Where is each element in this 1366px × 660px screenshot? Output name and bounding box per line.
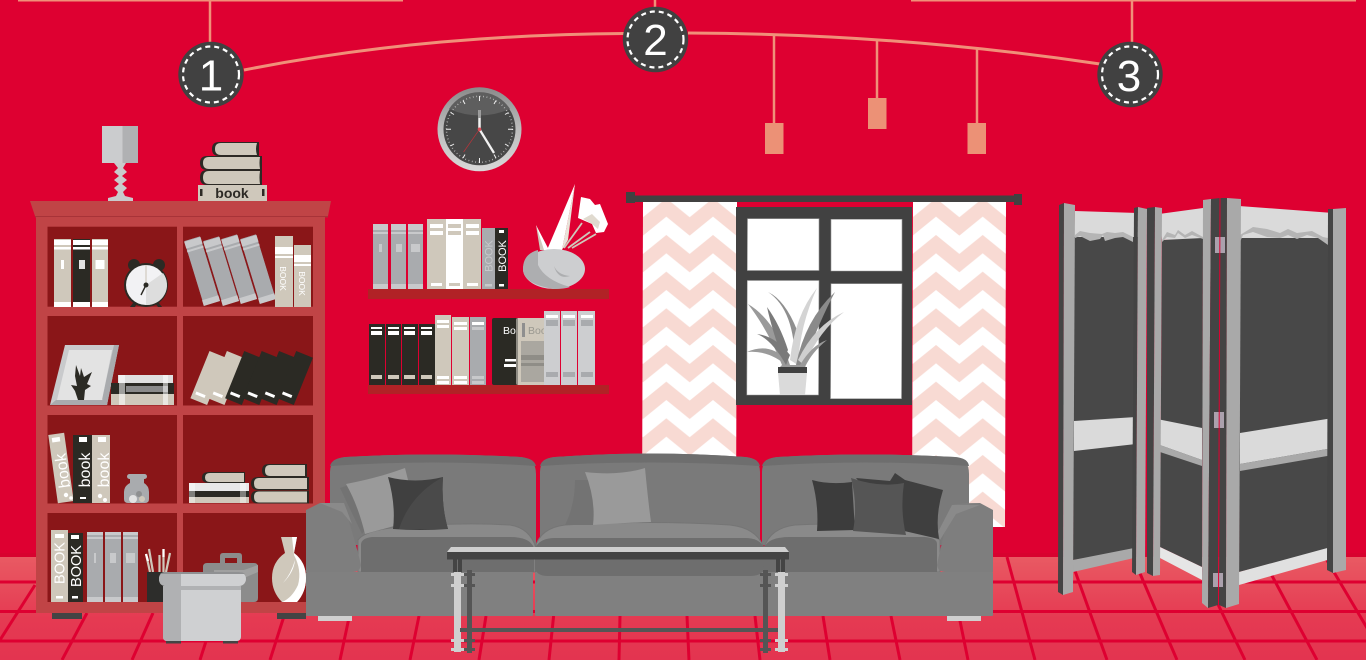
shelf 1 right: BOOK spines: BOOK (297, 271, 307, 296)
table top (447, 547, 789, 560)
upper row BOOK spines (482, 228, 509, 289)
shelf 3 left: book spines: book (96, 452, 113, 487)
badge 3 (1097, 42, 1163, 107)
wall clock (438, 87, 522, 171)
lower row black books (369, 324, 435, 385)
screen panel 1 (1058, 203, 1147, 595)
glass jar (124, 474, 149, 503)
front-facing black book (492, 318, 522, 385)
sofa base (306, 566, 993, 621)
shelf 3 left: book spines: book (77, 452, 94, 487)
screen panel 2 (1147, 198, 1220, 608)
table lamp (102, 126, 138, 201)
curtain rod (626, 192, 1022, 205)
right curtain (912, 202, 1006, 527)
front-facing black book: Boo (503, 325, 522, 337)
sofa seats (358, 522, 940, 576)
pendant lamps (765, 35, 986, 154)
front-facing beige book (516, 318, 547, 385)
lower row beige and grey books (435, 315, 486, 385)
sofa back cushions (330, 454, 969, 545)
lower row light grey books (544, 311, 595, 385)
bookcase (30, 126, 331, 644)
stacked boxes beside frame (111, 375, 174, 405)
vase (272, 537, 306, 602)
wall shelf with lower row of books (368, 311, 609, 394)
badge 2: 2 (643, 16, 668, 65)
alarm clock (124, 259, 168, 307)
picture frame (50, 345, 119, 405)
pen cup (146, 549, 170, 602)
shelf 4 left: book spines (51, 530, 138, 602)
briefcase (203, 553, 258, 602)
stacked books on top of bookcase: book (215, 185, 249, 201)
screen panel 3 (1219, 198, 1346, 608)
upper row BOOK spines: BOOK (497, 239, 509, 272)
sofa (306, 454, 993, 621)
folding screen (1058, 198, 1346, 608)
left curtain (642, 202, 737, 527)
front-facing beige book: Boo (528, 325, 547, 337)
lower shelf board (368, 385, 609, 394)
upper row grey books (373, 224, 423, 289)
hanging cord lines at the top (18, 0, 1356, 70)
wall shelf with upper row of books and vase (368, 184, 609, 299)
badge 1 (178, 42, 244, 107)
shelf 3 right: stacked books (189, 464, 309, 504)
shelf 4 left: book spines: BOOK (69, 545, 85, 587)
window (736, 207, 912, 405)
stacked books on top of bookcase (198, 142, 267, 201)
shelf 1 right: leaning grey books (184, 234, 276, 306)
coffee table (447, 547, 789, 653)
badge 2 (623, 7, 688, 72)
upper row BOOK spines: BOOK (484, 239, 496, 272)
screen hinges (1213, 237, 1225, 587)
ottoman (159, 572, 246, 644)
shelf 1 right: BOOK spines: BOOK (278, 266, 288, 291)
badge 1: 1 (199, 52, 223, 100)
badge 3: 3 (1117, 52, 1141, 101)
upper shelf board (368, 289, 609, 299)
floor with tiles (0, 553, 1366, 660)
potted plant (747, 288, 844, 395)
vase with flowers (523, 184, 608, 289)
upper row beige and white books (427, 219, 481, 289)
bookcase frame (30, 201, 331, 619)
shelf 4 left: book spines: BOOK (52, 542, 68, 584)
shelf 3 left: book spines (48, 432, 113, 503)
shelf 1 left: upright books (54, 239, 108, 307)
sofa armrests (306, 503, 993, 572)
shelf 3 left: book spines: book (52, 451, 74, 489)
cushions: dark right group (812, 473, 943, 539)
cushion: light grey left (340, 468, 408, 534)
cushion: light grey centre (565, 468, 651, 525)
shelf 1 right: BOOK spines (275, 236, 311, 307)
shelf 2 right: leaning books (190, 351, 313, 405)
table legs (451, 559, 788, 653)
cushion: dark left (388, 477, 448, 530)
